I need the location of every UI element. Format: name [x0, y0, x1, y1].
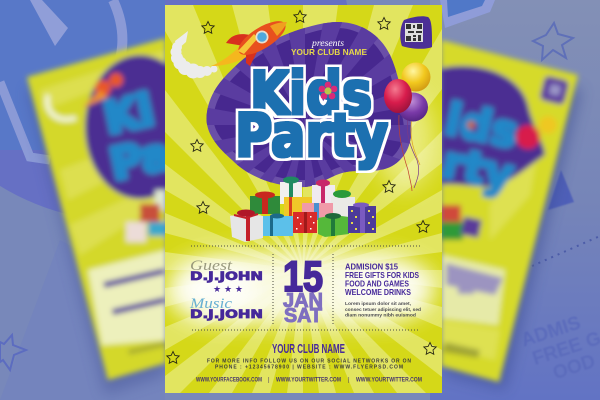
decorative star: lower left [0, 335, 26, 370]
guest panel: Guest [190, 258, 233, 274]
decorative star: upper right [533, 23, 573, 60]
website links: | [348, 378, 350, 384]
gift: dark red and green [250, 192, 280, 214]
lorem text: Lorem ipsum dolor sit amet, [345, 301, 411, 306]
title: Kids Party: Kids [250, 59, 372, 129]
event details: FOOD AND GAMES [345, 278, 409, 288]
purple blob [206, 22, 412, 188]
QR code [400, 16, 432, 49]
guest panel [189, 258, 263, 321]
gift boxes [230, 176, 376, 242]
decorative triangle [548, 170, 574, 210]
gift: red with dots [293, 212, 317, 233]
lorem text: consec tetuer adipiscing elit, sed [345, 307, 421, 312]
website links [196, 378, 422, 384]
title: Kids Party [235, 59, 388, 171]
gift: pink [302, 203, 333, 220]
gift: pink top [312, 180, 335, 205]
gift: purple with dots [348, 202, 376, 233]
main poster [165, 5, 442, 393]
poster background with sunburst [165, 5, 442, 393]
guest panel: D.J.JOHN [190, 269, 263, 283]
contact text: PHONE : +12345678900 | WEBSITE : WWW.FLYERPSD.COM [215, 364, 403, 370]
gift: white top [280, 176, 302, 204]
guest panel: D.J.JOHN [190, 307, 263, 321]
event details [345, 264, 419, 295]
date panel: SAT [284, 305, 322, 327]
website links: | [268, 378, 270, 384]
icon: flower [319, 82, 337, 100]
date panel: JAN [283, 290, 323, 312]
date panel [282, 260, 323, 322]
left blurred poster: Pa [106, 128, 176, 191]
website links: WWW.YOURFACEBOOK.COM [196, 378, 262, 384]
event details: FREE GIFTS FOR KIDS [345, 270, 419, 280]
guest panel: Music [189, 296, 232, 312]
dotted dividers [191, 246, 420, 330]
gift: yellow [284, 197, 312, 216]
right blurred poster: ids [441, 94, 523, 159]
balloons [384, 62, 430, 191]
contact text: FOR MORE INFO FOLLOW US ON OUR SOCIAL NETWORKS OR ON [207, 358, 411, 364]
icon: rocket [211, 21, 287, 66]
date panel: 15 [283, 253, 323, 301]
gift: green bow [331, 190, 355, 217]
right blurred poster: rty [438, 137, 518, 202]
contact text [207, 358, 411, 370]
website links: WWW.YOURTWITTER.COM [356, 378, 422, 384]
lorem text [345, 301, 421, 318]
background text: ADMIS [519, 313, 583, 352]
presents script: presents [311, 38, 345, 48]
club name top: YOUR CLUB NAME [291, 47, 367, 57]
website links: WWW.YOURTWITTER.COM [276, 378, 341, 384]
lorem text: diam nonummy nibh euismod [345, 312, 416, 318]
event details: WELCOME DRINKS [345, 287, 411, 297]
background text: OOD [550, 351, 598, 384]
gift: green [318, 213, 349, 237]
stars [167, 10, 436, 363]
gift: light blue [263, 214, 293, 236]
left blurred poster [24, 34, 165, 394]
right blurred poster [438, 40, 582, 390]
gift: white with red ribbon [230, 210, 263, 242]
icon: three stars: ★★★ [213, 285, 243, 295]
left blurred poster: Ki [100, 85, 158, 145]
club name bottom: YOUR CLUB NAME [272, 341, 345, 356]
background text [524, 316, 600, 376]
event details: ADMISION $15 [345, 262, 398, 272]
dotted line [532, 236, 600, 266]
smoke trail [170, 31, 218, 78]
title: Kids Party: Party [235, 101, 388, 171]
